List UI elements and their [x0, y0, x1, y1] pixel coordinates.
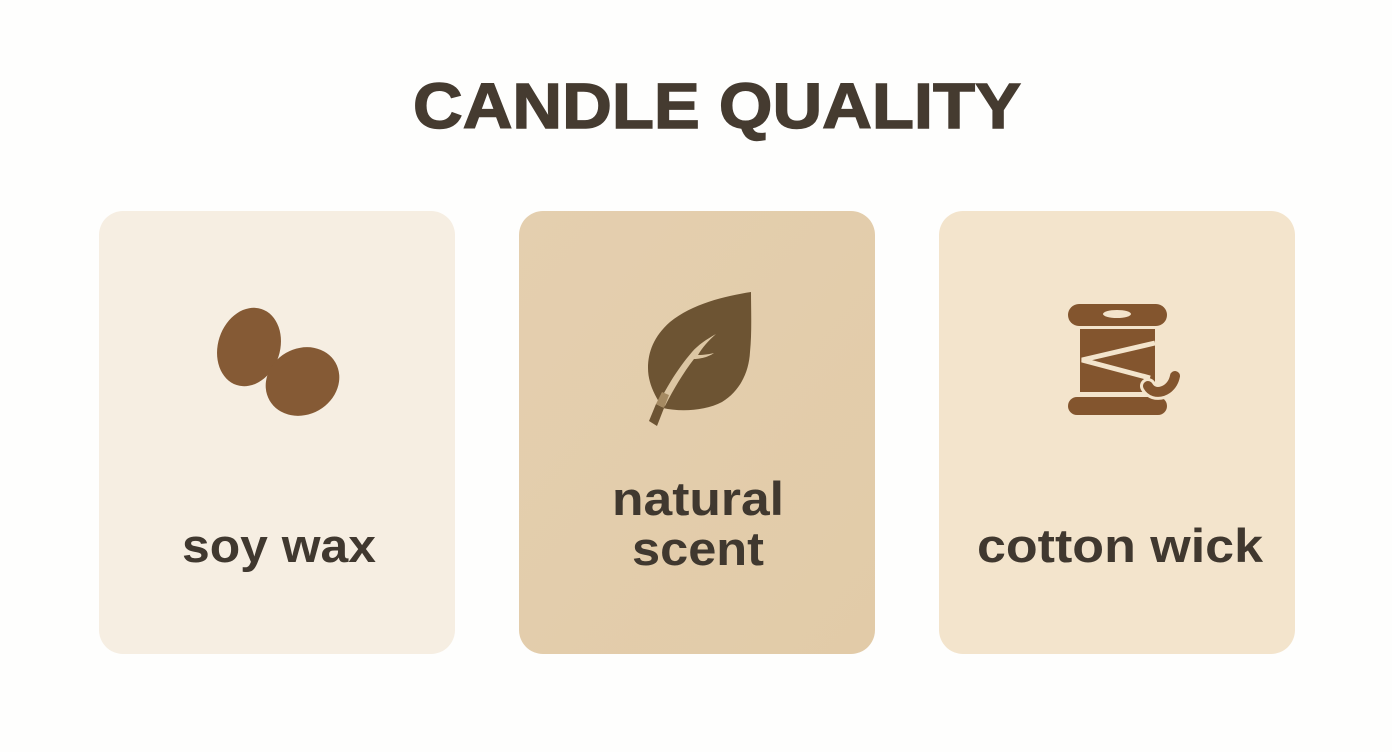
- panel: cotton wick: [939, 211, 1295, 654]
- label: natural scent: natural: [612, 472, 784, 525]
- label: natural scent: scent: [632, 522, 764, 575]
- label: soy wax: soy wax: [182, 519, 376, 572]
- panel: natural scent: [519, 211, 875, 654]
- icon: soy beans: [207, 299, 352, 429]
- label: natural scent: [612, 472, 784, 575]
- card background: natural scent: [519, 211, 875, 654]
- icon: leaf: [648, 292, 751, 426]
- card background: soy wax: [99, 211, 455, 654]
- icon: spool of thread: [1068, 304, 1175, 415]
- title: CANDLE QUALITY: [413, 70, 1021, 142]
- panel: soy wax: [99, 211, 455, 654]
- label: cotton wick: cotton wick: [977, 519, 1264, 572]
- card background: cotton wick: [939, 211, 1295, 654]
